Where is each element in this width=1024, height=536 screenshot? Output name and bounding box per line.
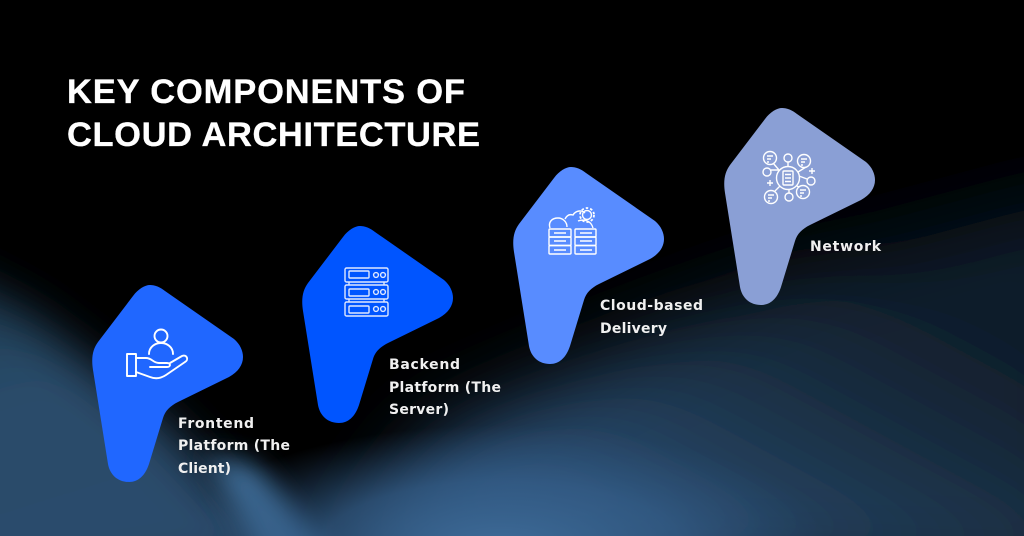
label: cloud-based delivery: Delivery bbox=[600, 321, 667, 337]
label: frontend platform bbox=[178, 416, 290, 477]
network blob shape bbox=[724, 108, 875, 305]
label: frontend platform: Platform (The bbox=[178, 438, 290, 454]
icon: server rack bbox=[345, 268, 388, 316]
panel: network bbox=[724, 108, 882, 305]
title bbox=[67, 73, 480, 154]
frontend blob shape bbox=[92, 285, 243, 482]
icon: hand holding user bbox=[127, 330, 187, 378]
panel: backend platform bbox=[302, 226, 501, 423]
label: cloud-based delivery: Cloud-based bbox=[600, 298, 703, 314]
label: frontend platform: Client) bbox=[178, 461, 231, 477]
label: backend platform bbox=[389, 357, 501, 418]
icon: network hub bbox=[763, 152, 815, 204]
panel: frontend platform bbox=[92, 285, 290, 482]
label: network: Network bbox=[810, 239, 882, 255]
backend blob shape bbox=[302, 226, 453, 423]
label: frontend platform: Frontend bbox=[178, 416, 254, 432]
panel: cloud-based delivery bbox=[513, 167, 703, 364]
label: backend platform: Server) bbox=[389, 402, 449, 418]
title: CLOUD ARCHITECTURE bbox=[67, 116, 480, 154]
icon: cloud servers bbox=[549, 208, 596, 254]
title: KEY COMPONENTS OF bbox=[67, 73, 465, 111]
label: cloud-based delivery bbox=[600, 298, 703, 337]
cloud blob shape bbox=[513, 167, 664, 364]
label: backend platform: Backend bbox=[389, 357, 460, 373]
label: backend platform: Platform (The bbox=[389, 380, 501, 396]
